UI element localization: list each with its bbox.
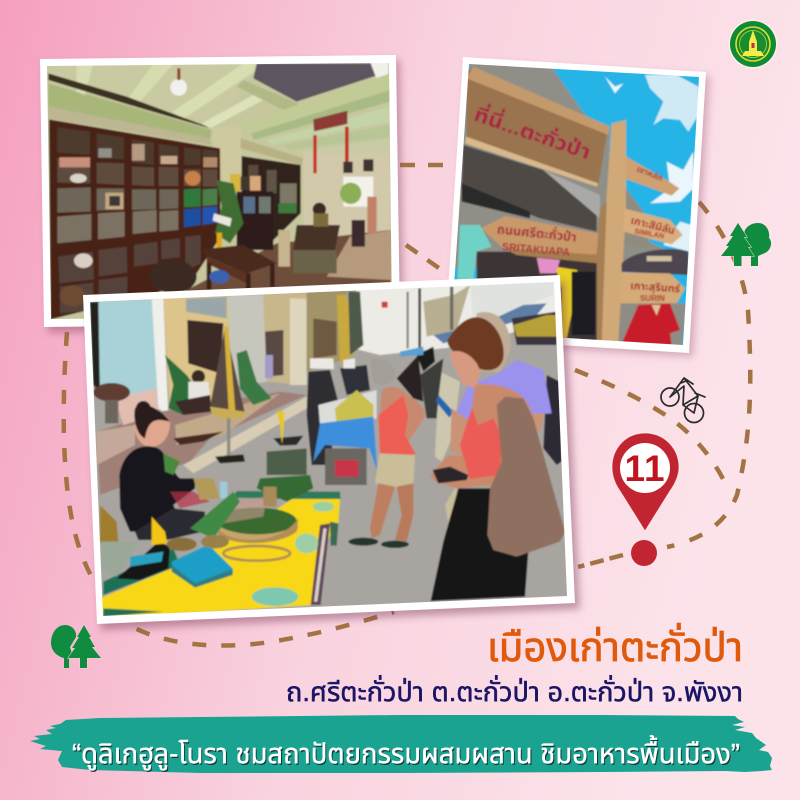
icon: location pin 11 — [612, 433, 679, 566]
dashed route — [64, 165, 750, 646]
photo: wooden signposts: เกาะสิมิลัน — [629, 215, 676, 237]
icon: trees left — [51, 625, 101, 668]
photo: wooden signposts: SURIN — [640, 294, 665, 303]
main cabinet — [49, 119, 221, 319]
icon: location pin 11: 11 — [624, 448, 666, 489]
photo: wooden signposts: เกาะสุรินทร์ — [630, 280, 681, 296]
icon: bicycle — [661, 378, 705, 422]
title: เมืองเก่าตะกั่วป่า — [487, 622, 743, 670]
photo: shophouse interior — [40, 55, 404, 333]
photo: wooden signposts: เขาหลัก — [635, 164, 665, 183]
banner: brush stroke slogan — [30, 715, 772, 773]
banner: brush stroke slogan: “ดูลิเกฮูลู-โนรา ชมสถาปัตยกรรมผสมผสาน ชิมอาหารพื้นเมือง” — [73, 736, 741, 772]
photo: wooden signposts: SRITAKUAPA — [501, 241, 571, 259]
banner: brush stroke slogan: “ดูลิเกฮูลู-โนรา ชมสถาปัตยกรรมผสมผสาน ชิมอาหารพื้นเมือง” — [72, 735, 740, 770]
icon: trees right — [721, 223, 771, 266]
photo: wooden signposts — [445, 57, 710, 357]
photo: street market — [80, 275, 580, 630]
address: ถ.ศรีตะกั่วป่า ต.ตะกั่วป่า อ.ตะกั่วป่า จ.พังงา — [286, 675, 743, 707]
photo: wooden signposts: SIMILAN — [634, 226, 665, 241]
photo: wooden signposts: ที่นี่...ตะกั่วป่า — [471, 100, 595, 164]
logo — [728, 20, 778, 68]
photo: wooden signposts: ถนนศรีตะกั่วป่า — [496, 220, 578, 245]
